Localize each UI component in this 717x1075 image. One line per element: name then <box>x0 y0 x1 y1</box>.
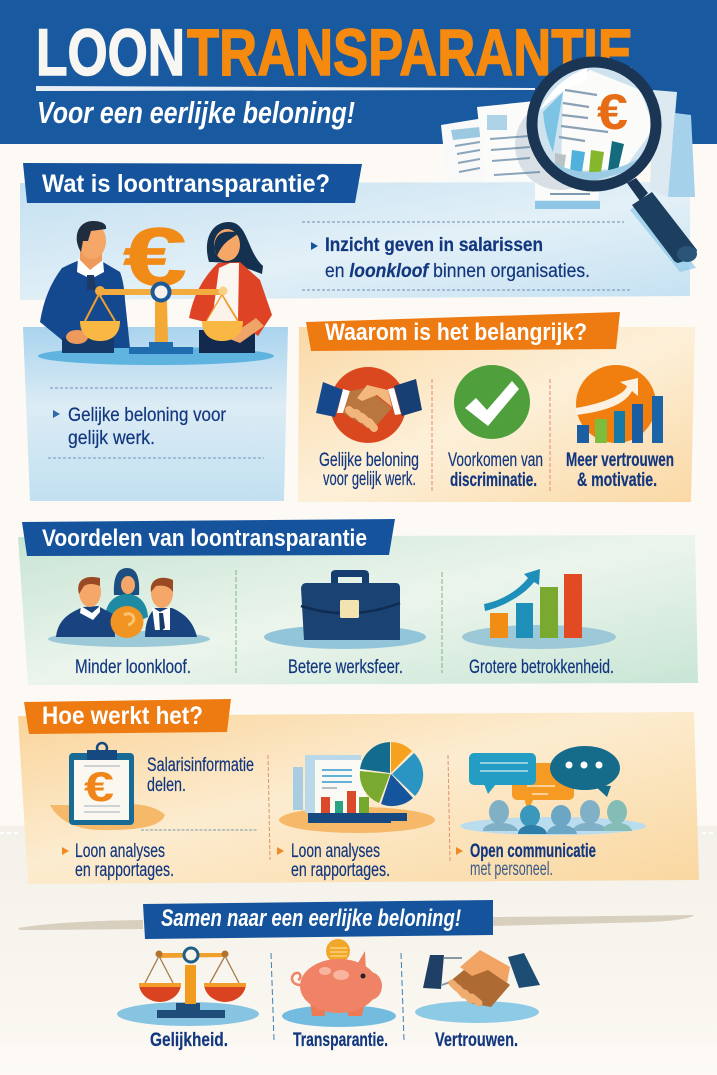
panel: voordelen <box>18 535 698 685</box>
illustration: man, woman, scale and euro <box>38 210 274 365</box>
title: LOON <box>36 15 185 89</box>
text: inzicht: Inzicht geven in salarissen <box>325 235 543 256</box>
text: gelijke beloning <box>48 388 272 458</box>
icon: clipboard with euro: € <box>84 763 114 810</box>
captions: samen: Transparantie. <box>293 1030 388 1051</box>
panel: hoe werkt het <box>18 712 699 884</box>
dividers: voordelen <box>236 570 442 673</box>
title <box>36 15 633 89</box>
captions: waarom: discriminatie. <box>450 470 537 491</box>
banner: wat is loontransparantie: Wat is loontransparantie? <box>42 170 330 198</box>
text: open communicatie: met personeel. <box>470 859 553 880</box>
captions: waarom <box>319 450 674 491</box>
icon: clipboard with euro <box>50 743 165 830</box>
panel: wat is loontransparantie background <box>20 182 690 501</box>
icon: magnifying glass <box>532 62 697 272</box>
dividers: hoe werkt het <box>268 755 450 862</box>
text: inzicht <box>302 222 630 290</box>
icon: documents <box>441 90 695 209</box>
panel: waarom is het belangrijk <box>298 327 695 502</box>
captions: samen: Gelijkheid. <box>150 1030 228 1051</box>
dividers: samen <box>271 953 404 1040</box>
captions: waarom: & motivatie. <box>577 470 657 491</box>
icon: handshake in red circle <box>316 367 422 443</box>
captions: voordelen: Minder loonkloof. <box>75 657 191 678</box>
icon: speech bubbles and audience <box>460 746 646 835</box>
captions: waarom: voor gelijk werk. <box>323 469 416 490</box>
icon: team with coin <box>48 568 210 647</box>
banner: hoe werkt het: Hoe werkt het? <box>42 702 203 730</box>
captions: waarom: Gelijke beloning <box>319 450 419 471</box>
text: loon analyses 1: en rapportages. <box>75 860 174 881</box>
captions: samen <box>150 1030 518 1051</box>
text: loon analyses 2: en rapportages. <box>291 860 390 881</box>
man <box>40 221 130 353</box>
banner: samen naar een eerlijke beloning <box>143 900 493 939</box>
banner: wat is loontransparantie <box>23 163 362 203</box>
brown ribbon strip <box>18 915 694 930</box>
balance scale <box>80 284 243 354</box>
text: salarisinformatie <box>141 755 257 830</box>
captions: voordelen <box>75 657 614 678</box>
text: loon analyses 2 <box>277 841 390 881</box>
text: gelijke beloning: Gelijke beloning voor <box>68 405 227 426</box>
text: loon analyses 2: Loon analyses <box>291 841 380 862</box>
icon: briefcase <box>264 570 426 649</box>
dividers: waarom <box>432 379 550 491</box>
header band <box>0 0 717 144</box>
banner: voordelen: Voordelen van loontransparantie <box>42 525 367 552</box>
icon: green check <box>454 365 530 439</box>
banner: waarom <box>306 312 620 351</box>
text: gelijke beloning: gelijk werk. <box>68 428 155 449</box>
text: inzicht: en loonkloof binnen organisaties. <box>325 261 590 282</box>
text: loon analyses 1: Loon analyses <box>75 841 165 862</box>
captions: voordelen: Grotere betrokkenheid. <box>469 657 614 678</box>
captions: voordelen: Betere werksfeer. <box>288 657 403 678</box>
icon: rising bars <box>462 569 616 649</box>
large euro: € <box>123 210 187 303</box>
text: loon analyses 1 <box>62 841 174 881</box>
icon: magnifying glass: € <box>597 84 628 140</box>
text: salarisinformatie: delen. <box>147 775 186 796</box>
banner: samen naar een eerlijke beloning: Samen naar een eerlijke beloning! <box>161 905 461 932</box>
icon: growth chart on orange circle <box>576 365 663 443</box>
icon: report with pie chart <box>279 742 435 833</box>
subtitle: Voor een eerlijke beloning! <box>37 95 355 130</box>
title underline <box>36 86 535 91</box>
icon: handshake <box>415 950 540 1023</box>
icon: balance scale <box>117 948 259 1026</box>
banner: waarom: Waarom is het belangrijk? <box>325 319 587 346</box>
woman <box>189 222 272 353</box>
captions: waarom: Meer vertrouwen <box>566 450 674 471</box>
text: open communicatie <box>456 841 596 880</box>
icon: piggy bank <box>282 939 396 1027</box>
captions: waarom: Voorkomen van <box>448 450 543 471</box>
captions: samen: Vertrouwen. <box>435 1030 518 1051</box>
banner: hoe werkt het <box>24 699 231 734</box>
text: salarisinformatie: Salarisinformatie <box>147 755 254 776</box>
banner: voordelen <box>22 519 395 556</box>
text: open communicatie: Open communicatie <box>470 841 596 862</box>
